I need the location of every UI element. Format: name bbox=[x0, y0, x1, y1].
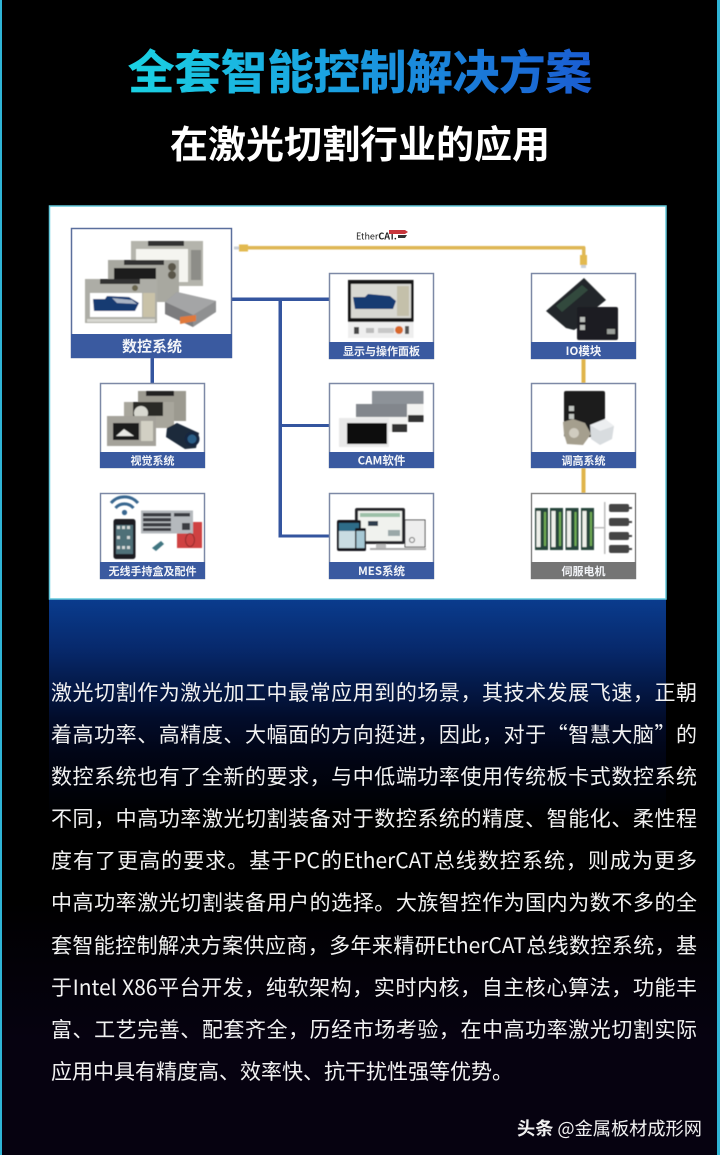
box: 伺服电机 bbox=[531, 494, 636, 579]
text block: description paragraph: 激光切割作为激光加工中最常应用到的场景，其技术发展飞速，正朝 bbox=[51, 677, 697, 707]
box: 数控系统 bbox=[71, 228, 232, 358]
text block: description paragraph: 度有了更高的要求。基于PC的EtherCAT总线数控系统，则成为更多 bbox=[51, 845, 697, 875]
icon: vision screens and camera bbox=[107, 391, 200, 449]
icon: height control bbox=[563, 391, 614, 445]
box: 视觉系统: 视觉系统 bbox=[130, 452, 174, 468]
icon: CAM screens bbox=[339, 391, 424, 447]
box: 视觉系统 bbox=[100, 384, 205, 468]
text block: description paragraph: 中高功率激光切割装备用户的选择。大族智控作为国内为数不多的全 bbox=[51, 887, 697, 917]
text block: description paragraph: 富、工艺完善、配套齐全，历经市场考验，在中高功率激光切割实际 bbox=[51, 1014, 697, 1044]
icon: wifi, handheld and keyboard bbox=[111, 497, 202, 559]
watermark: 头条@金属板材成形网 bbox=[517, 1115, 702, 1141]
icon: IO modules bbox=[546, 278, 618, 340]
box: 显示与操作面板 bbox=[329, 274, 434, 359]
box: CAM软件: CAM软件 bbox=[358, 452, 406, 468]
title: 全套智能控制解决方案 bbox=[128, 36, 592, 103]
text block: description paragraph bbox=[51, 677, 697, 1086]
text block: description paragraph: 不同，中高功率激光切割装备对于数控系统的精度、智能化、柔性程 bbox=[51, 803, 697, 833]
arrow: blue connection lines bbox=[150, 298, 329, 538]
box: IO模块 bbox=[531, 274, 636, 359]
box: 无线手持盒及配件 bbox=[100, 494, 205, 579]
text block: description paragraph: 着高功率、高精度、大幅面的方向挺进，因此，对于“智慧大脑”的 bbox=[51, 719, 697, 749]
box: MES系统: MES系统 bbox=[358, 563, 406, 579]
box: 显示与操作面板: 显示与操作面板 bbox=[343, 343, 420, 359]
box: 调高系统: 调高系统 bbox=[562, 452, 606, 468]
text block: description paragraph: 应用中具有精度高、效率快、抗干扰性强等优势。 bbox=[51, 1056, 513, 1086]
box: 调高系统 bbox=[531, 384, 636, 468]
icon: display panel bbox=[348, 280, 414, 338]
box: 伺服电机: 伺服电机 bbox=[562, 563, 606, 579]
icon: CNC screens and controller bbox=[85, 241, 216, 327]
logo: EtherCAT: EtherCAT. bbox=[356, 230, 397, 242]
box: IO模块: IO模块 bbox=[566, 343, 602, 359]
box: MES系统 bbox=[329, 494, 434, 579]
icon: MES devices bbox=[337, 508, 426, 551]
box: 无线手持盒及配件: 无线手持盒及配件 bbox=[108, 563, 196, 579]
subtitle: 在激光切割行业的应用 bbox=[170, 114, 550, 169]
icon: servo drives and motors bbox=[535, 502, 632, 554]
box: CAM软件 bbox=[329, 384, 434, 468]
text block: description paragraph: 套智能控制解决方案供应商，多年来精研EtherCAT总线数控系统，基 bbox=[51, 930, 697, 960]
box: 数控系统: 数控系统 bbox=[122, 336, 182, 356]
arrow: EtherCAT yellow cable bbox=[234, 244, 587, 493]
text block: description paragraph: 于Intel X86平台开发，纯软架构，实时内核，自主核心算法，功能丰 bbox=[51, 972, 697, 1002]
panel: system architecture diagram bbox=[48, 205, 667, 600]
text block: description paragraph: 数控系统也有了全新的要求，与中低端功率使用传统板卡式数控系统 bbox=[51, 761, 697, 791]
